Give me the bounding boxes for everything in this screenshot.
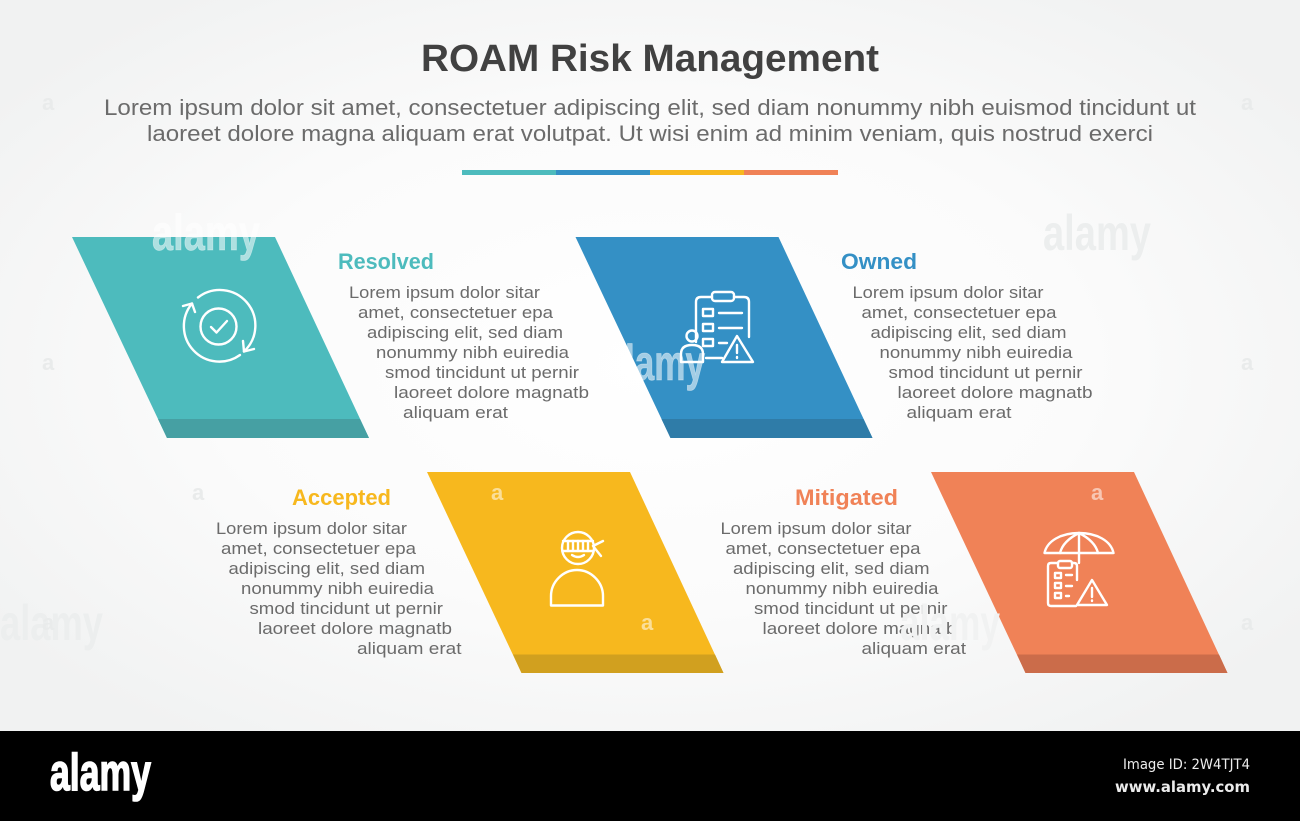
watermarks: a bbox=[1241, 610, 1254, 635]
panel: Mitigated bbox=[720, 472, 1228, 673]
subtitle text: Lorem ipsum dolor sit amet, consectetuer adipiscing elit, sed diam nonummy nibh euismod tincidunt ut bbox=[104, 95, 1197, 120]
text block: Resolved: smod tincidunt ut pernir bbox=[385, 363, 579, 382]
text block: Owned: aliquam erat bbox=[906, 403, 1012, 422]
footer url: www.alamy.com bbox=[1115, 778, 1250, 796]
text block: Owned bbox=[852, 283, 1092, 422]
text block: Accepted bbox=[216, 519, 462, 658]
icon: clipboard, person and warning bbox=[681, 292, 753, 362]
text block: Owned: nonummy nibh euiredia bbox=[880, 343, 1073, 362]
heading: Owned: Owned bbox=[841, 249, 917, 274]
text block: Owned: smod tincidunt ut pernir bbox=[888, 363, 1083, 382]
subtitle text bbox=[104, 95, 1197, 146]
text block: Resolved bbox=[349, 283, 589, 422]
text block: Accepted: smod tincidunt ut pernir bbox=[250, 599, 443, 618]
heading: Resolved: Resolved bbox=[338, 249, 434, 274]
watermarks: alamy bbox=[900, 595, 1000, 651]
icon: person with bandana bbox=[551, 532, 603, 606]
icon: umbrella, clipboard and warning bbox=[1044, 533, 1114, 606]
text block: Resolved: amet, consectetuer epa bbox=[358, 303, 554, 322]
watermarks: a bbox=[192, 480, 205, 505]
panel: Accepted bbox=[216, 472, 724, 673]
parallelogram: Accepted bbox=[427, 472, 724, 673]
parallelogram: Mitigated bbox=[931, 472, 1228, 673]
heading: Mitigated: Mitigated bbox=[795, 485, 898, 510]
text block: Resolved: nonummy nibh euiredia bbox=[376, 343, 570, 362]
text block: Mitigated: amet, consectetuer epa bbox=[726, 539, 921, 558]
footer bar bbox=[0, 731, 1300, 821]
watermarks: a bbox=[641, 610, 654, 635]
watermarks bbox=[0, 90, 1254, 651]
text block: Owned: amet, consectetuer epa bbox=[862, 303, 1057, 322]
parallelogram: Owned bbox=[576, 237, 872, 438]
text block: Mitigated: aliquam erat bbox=[862, 639, 966, 658]
panel: Resolved bbox=[72, 237, 589, 438]
watermarks: alamy bbox=[0, 595, 103, 651]
text block: Mitigated: nonummy nibh euiredia bbox=[746, 579, 939, 598]
text block: Mitigated: laoreet dolore magnatb bbox=[762, 619, 956, 638]
watermarks: a bbox=[1091, 480, 1104, 505]
watermarks: alamy bbox=[1043, 205, 1151, 261]
watermarks: a bbox=[1241, 350, 1254, 375]
watermarks: a bbox=[1241, 90, 1254, 115]
text block: Resolved: aliquam erat bbox=[403, 403, 508, 422]
footer logo: alamy bbox=[50, 744, 151, 802]
parallelogram: Resolved bbox=[72, 237, 369, 438]
text block: Accepted: nonummy nibh euiredia bbox=[241, 579, 435, 598]
subtitle text: laoreet dolore magna aliquam erat volutpat. Ut wisi enim ad minim veniam, quis nostrud exerci bbox=[147, 121, 1153, 146]
text block: Accepted: Lorem ipsum dolor sitar bbox=[216, 519, 407, 538]
watermarks: alamy bbox=[152, 205, 260, 261]
footer image id: Image ID: 2W4TJT4 bbox=[1123, 757, 1250, 773]
title: ROAM Risk Management bbox=[421, 38, 879, 80]
icon: cycle with check bbox=[183, 290, 255, 362]
panel: Owned bbox=[576, 237, 1092, 438]
watermarks: a bbox=[42, 90, 55, 115]
watermarks: lamy bbox=[625, 335, 705, 391]
watermarks: a bbox=[491, 480, 504, 505]
text block: Resolved: Lorem ipsum dolor sitar bbox=[349, 283, 540, 302]
text block: Mitigated: adipiscing elit, sed diam bbox=[733, 559, 930, 578]
text block: Mitigated bbox=[720, 519, 966, 658]
heading: Accepted: Accepted bbox=[292, 485, 391, 510]
text block: Resolved: adipiscing elit, sed diam bbox=[367, 323, 563, 342]
text block: Owned: adipiscing elit, sed diam bbox=[870, 323, 1066, 342]
text block: Accepted: adipiscing elit, sed diam bbox=[228, 559, 425, 578]
text block: Accepted: laoreet dolore magnatb bbox=[258, 619, 452, 638]
text block: Accepted: amet, consectetuer epa bbox=[221, 539, 417, 558]
text block: Owned: Lorem ipsum dolor sitar bbox=[852, 283, 1044, 302]
title divider: four colour bar bbox=[462, 170, 838, 175]
text block: Resolved: laoreet dolore magnatb bbox=[394, 383, 589, 402]
text block: Mitigated: Lorem ipsum dolor sitar bbox=[720, 519, 912, 538]
text block: Accepted: aliquam erat bbox=[357, 639, 462, 658]
text block: Mitigated: smod tincidunt ut pernir bbox=[754, 599, 948, 618]
watermarks: a bbox=[42, 610, 55, 635]
watermarks: a bbox=[42, 350, 55, 375]
text block: Owned: laoreet dolore magnatb bbox=[898, 383, 1092, 402]
